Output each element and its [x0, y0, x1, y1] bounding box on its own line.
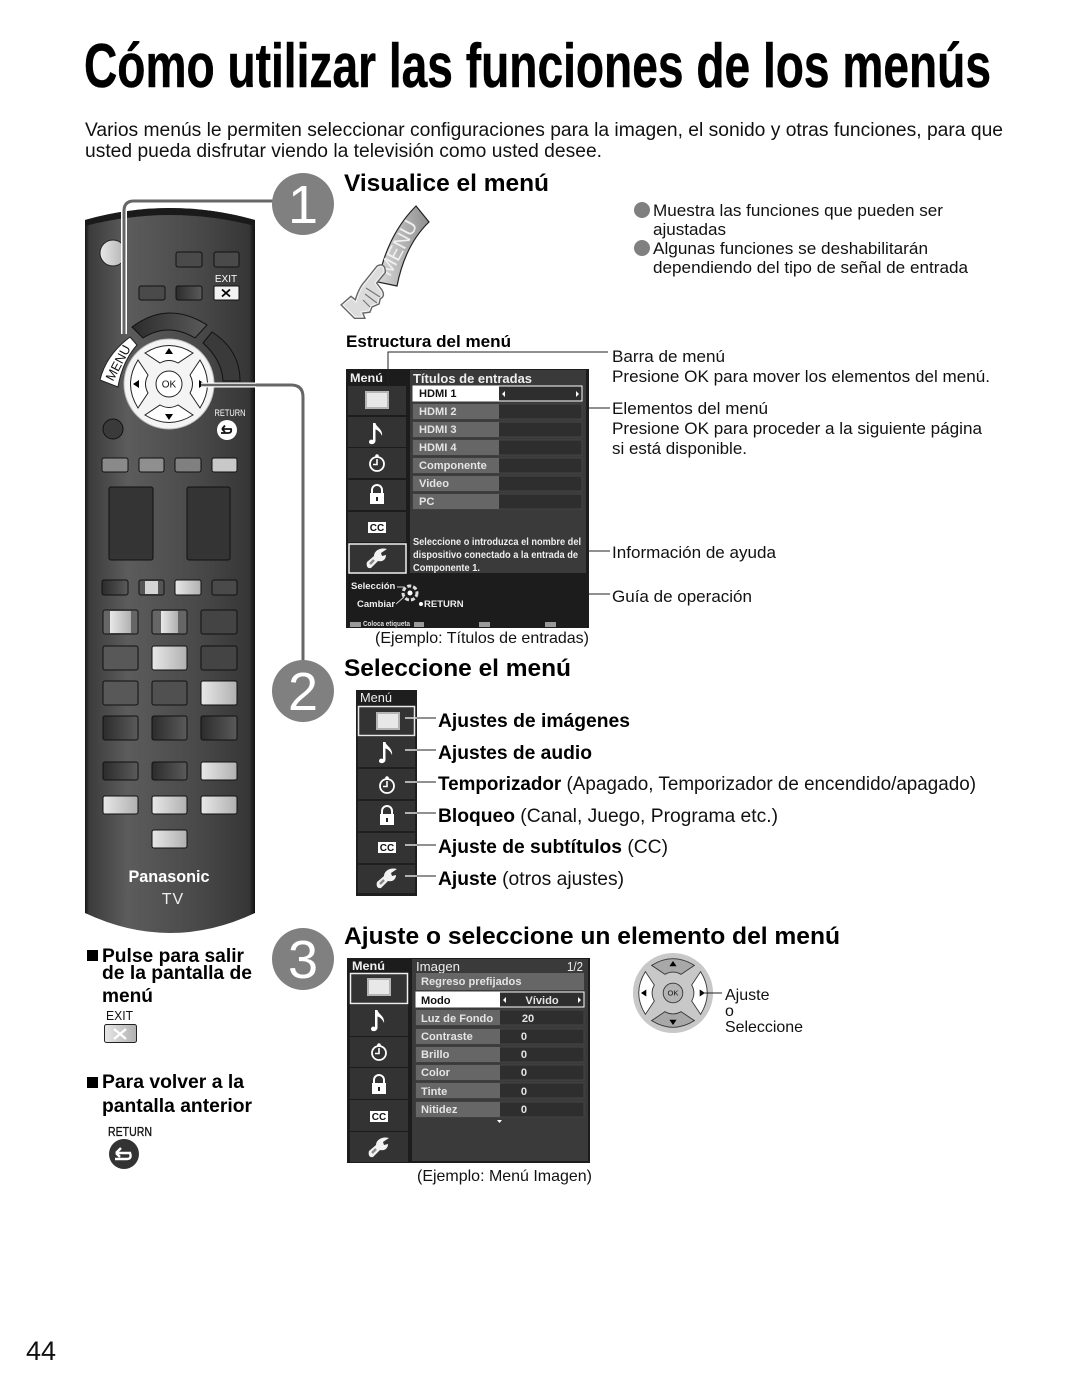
tv label: TV — [162, 891, 184, 908]
picture panel background — [412, 959, 588, 1161]
help text: Componente 1. — [413, 563, 480, 574]
menu rows: Vívido — [525, 995, 559, 1007]
callouts: side menu — [405, 718, 436, 876]
panel: picture menu screenshot — [347, 958, 590, 1163]
callout: adjust or select: Seleccione — [725, 1019, 803, 1036]
caption: example 1: (Ejemplo: Títulos de entradas) — [375, 630, 589, 647]
channel/volume arcs — [132, 313, 207, 338]
intro paragraph: usted pueda disfrutar viendo la televisión como usted desee. — [85, 140, 602, 162]
menu items: HDMI 4 — [419, 442, 457, 454]
note: previous screen: pantalla anterior — [102, 1096, 253, 1117]
panel: menu structure screenshot — [346, 369, 589, 628]
return label: RETURN — [214, 408, 246, 419]
panel header: Menú — [352, 959, 385, 973]
bullet notes: Algunas funciones se deshabilitarán — [653, 239, 928, 258]
return button — [217, 420, 237, 440]
colour buttons — [102, 458, 237, 472]
menu items: PC — [419, 496, 434, 508]
help text — [413, 537, 581, 574]
panel header: Imagen — [416, 959, 460, 974]
icon: d-pad adjust — [633, 953, 713, 1033]
panel: side menu: CC — [380, 843, 394, 854]
menu tab — [100, 337, 137, 387]
menu rows: Brillo — [421, 1049, 450, 1061]
step 1 number: 1 — [288, 175, 318, 235]
menu rows: 0 — [521, 1067, 527, 1079]
callout: adjust or select: Ajuste — [725, 987, 770, 1004]
menu items — [413, 386, 582, 509]
menu rows: Luz de Fondo — [421, 1013, 493, 1025]
note: exit menu: Pulse para salir — [102, 946, 245, 967]
menu items list — [438, 711, 976, 890]
menu items list: Temporizador (Apagado, Temporizador de encendido/apagado) — [438, 774, 976, 795]
icon: hand pressing menu — [343, 206, 429, 317]
note: previous screen: Para volver a la — [102, 1072, 244, 1093]
bullet notes: ajustadas — [653, 220, 726, 239]
panel: side menu — [356, 690, 417, 896]
page number: 44 — [26, 1336, 56, 1366]
icon: hand pressing menu: MENU — [375, 217, 422, 280]
menu label: Menú — [350, 371, 383, 385]
bullet notes: dependiendo del tipo de señal de entrada — [653, 258, 969, 277]
connector: step 2 to arrow — [201, 385, 303, 665]
menu tab: MENU — [102, 342, 134, 383]
note: previous screen: RETURN — [108, 1124, 152, 1139]
help/content panel — [410, 370, 586, 573]
menu rows: 0 — [521, 1049, 527, 1061]
exit label: EXIT — [215, 274, 237, 285]
menu items list: Ajustes de audio — [438, 743, 592, 764]
callouts: menu structure: si está disponible. — [612, 439, 747, 458]
callouts: menu structure: Barra de menú — [612, 347, 725, 366]
panel header: 1/2 — [567, 960, 583, 974]
callouts: menu structure: Presione OK para proceder a la siguiente página — [612, 419, 983, 438]
upper buttons — [139, 252, 239, 300]
bullet notes — [634, 201, 969, 277]
callouts: menu structure — [388, 347, 990, 606]
panel title: Títulos de entradas — [413, 371, 532, 386]
step 2 number: 2 — [288, 662, 318, 722]
menu rows: Nitidez — [421, 1104, 458, 1116]
heading: step 1: Visualice el menú — [344, 170, 549, 197]
note: exit menu: de la pantalla de — [102, 963, 252, 984]
callout: adjust or select: o — [725, 1003, 734, 1020]
caption: example 2: (Ejemplo: Menú Imagen) — [417, 1168, 592, 1185]
round button — [103, 419, 123, 439]
menu rows: 20 — [522, 1013, 534, 1025]
operation guide: Cambiar — [357, 599, 395, 610]
callout: adjust or select — [700, 987, 803, 1036]
callouts: menu structure: Guía de operación — [612, 587, 752, 606]
callouts: menu structure: Información de ayuda — [612, 543, 777, 562]
menu rows: Color — [421, 1067, 451, 1079]
intro paragraph — [85, 119, 1003, 162]
exit x icon — [222, 290, 230, 296]
callouts: menu structure: Presione OK para mover los elementos del menú. — [612, 367, 990, 386]
note: exit menu: EXIT — [106, 1008, 133, 1023]
menu rows: 0 — [521, 1031, 527, 1043]
menu items: Componente — [419, 460, 487, 472]
side icons: CC — [372, 1112, 386, 1123]
remote body — [85, 208, 255, 933]
menu rows: Modo — [421, 995, 451, 1007]
menu rows: 0 — [521, 1086, 527, 1098]
side icons — [350, 974, 408, 1162]
help text: Seleccione o introduzca el nombre del — [413, 537, 581, 548]
heading: step 2: Seleccione el menú — [344, 655, 571, 682]
large rockers — [109, 487, 230, 560]
side icons: CC — [370, 523, 384, 534]
step 2 number — [272, 660, 334, 722]
step 3 number — [272, 928, 334, 990]
help text: dispositivo conectado a la entrada de — [413, 550, 578, 561]
operation guide: Coloca etiqueta — [363, 621, 410, 628]
menu items: HDMI 2 — [419, 406, 457, 418]
side icons — [348, 386, 406, 573]
connector: step 1 to menu — [124, 201, 280, 334]
menu items list: Ajuste (otros ajustes) — [438, 869, 624, 890]
menu items: HDMI 1 — [419, 388, 457, 400]
menu rows — [416, 973, 584, 1123]
menu items: HDMI 3 — [419, 424, 457, 436]
intro paragraph: Varios menús le permiten seleccionar configuraciones para la imagen, el sonido y otras funciones, para que — [85, 119, 1003, 141]
button grid — [102, 580, 237, 848]
subheading: menu structure: Estructura del menú — [346, 332, 511, 351]
menu rows: 0 — [521, 1104, 527, 1116]
note: previous screen — [87, 1072, 253, 1169]
step 3 number: 3 — [288, 930, 318, 990]
remote control — [85, 208, 255, 933]
power button — [100, 240, 126, 266]
icon: d-pad adjust: OK — [668, 989, 678, 998]
operation guide — [350, 581, 556, 628]
callouts: menu structure: Elementos del menú — [612, 399, 768, 418]
bullet notes: Muestra las funciones que pueden ser — [653, 201, 943, 220]
menu items list: Ajustes de imágenes — [438, 711, 630, 732]
operation guide: RETURN — [424, 599, 464, 610]
menu items list: Bloqueo (Canal, Juego, Programa etc.) — [438, 806, 778, 827]
menu rows: Regreso prefijados — [421, 976, 522, 988]
d-pad: OK — [162, 380, 177, 390]
panel header — [352, 959, 583, 974]
menu items: Video — [419, 478, 449, 490]
remote top edge — [85, 208, 255, 226]
menu rows: Contraste — [421, 1031, 473, 1043]
d-pad — [124, 339, 214, 429]
heading: step 3: Ajuste o seleccione un elemento del menú — [344, 923, 840, 950]
menu rows: Tinte — [421, 1086, 447, 1098]
note: exit menu: menú — [102, 986, 153, 1007]
panel: side menu: Menú — [360, 690, 392, 705]
operation guide: Selección — [351, 581, 396, 592]
step 1 number — [272, 173, 334, 235]
menu items list: Ajuste de subtítulos (CC) — [438, 837, 668, 858]
note: exit menu — [87, 946, 252, 1042]
brand: Panasonic — [128, 868, 210, 886]
